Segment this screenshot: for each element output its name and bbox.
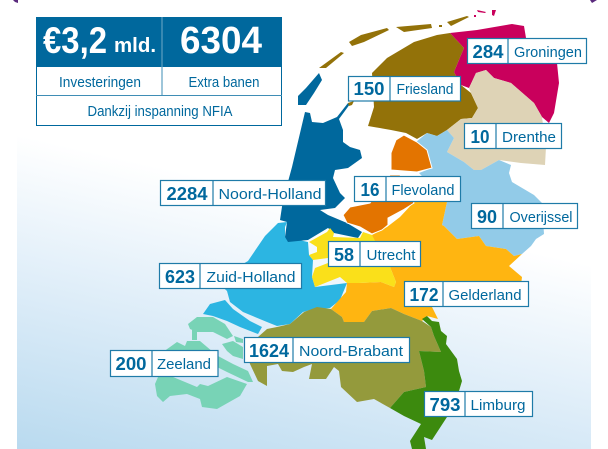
region: Noord-Brabant bbox=[245, 307, 441, 408]
label: Overijssel: Overijssel bbox=[510, 209, 572, 226]
jobs caption: Extra banen bbox=[188, 75, 260, 91]
investment figure: €3,2 bbox=[43, 20, 107, 61]
label: Groningen bbox=[468, 38, 586, 64]
label: Friesland: Friesland bbox=[396, 81, 454, 98]
label: Noord-Holland: Noord-Holland bbox=[218, 186, 322, 203]
region: Drenthe bbox=[447, 70, 546, 170]
label: Groningen: Groningen bbox=[514, 44, 582, 61]
label: Zeeland: 200 bbox=[116, 354, 146, 374]
region: Zuid-Holland bbox=[203, 220, 347, 334]
label: Friesland: 150 bbox=[354, 79, 384, 99]
label: Noord-Brabant bbox=[244, 337, 410, 363]
region: Utrecht bbox=[309, 228, 396, 287]
region: Gelderland bbox=[331, 202, 522, 322]
region: Overijssel bbox=[416, 130, 544, 256]
region: Flevoland bbox=[343, 135, 432, 234]
region: Friesland bbox=[319, 16, 478, 139]
label: Groningen: 284 bbox=[472, 42, 504, 62]
label: Overijssel: 90 bbox=[477, 207, 497, 227]
label: Gelderland: 172 bbox=[410, 285, 438, 305]
label: Drenthe bbox=[464, 123, 562, 149]
label: Noord-Brabant: 1624 bbox=[249, 341, 289, 361]
map of the Netherlands bbox=[155, 10, 559, 449]
label: Noord-Holland: 2284 bbox=[166, 184, 208, 204]
background panel bbox=[17, 100, 591, 449]
label: Utrecht bbox=[328, 241, 420, 267]
label: Zeeland: Zeeland bbox=[157, 356, 211, 373]
header band bbox=[36, 17, 282, 67]
label: Flevoland: Flevoland bbox=[392, 182, 454, 199]
jobs figure: 6304 bbox=[180, 20, 262, 62]
label: Zuid-Holland: Zuid-Holland bbox=[206, 269, 296, 286]
label: Zuid-Holland: 623 bbox=[165, 267, 195, 287]
label: Drenthe: 10 bbox=[470, 127, 490, 147]
label: Drenthe: Drenthe bbox=[502, 129, 556, 146]
label: Zeeland bbox=[110, 350, 218, 377]
purple corner mark, top right bbox=[590, 0, 597, 3]
region: Zeeland bbox=[155, 317, 253, 409]
table outline bbox=[36, 18, 282, 126]
label: Limburg: 793 bbox=[430, 395, 460, 415]
label: Noord-Holland bbox=[160, 180, 326, 206]
label: Gelderland bbox=[404, 281, 528, 307]
label: Limburg bbox=[424, 391, 532, 417]
label: Utrecht: Utrecht bbox=[366, 247, 416, 264]
purple corner mark, top left bbox=[13, 0, 18, 3]
label: Friesland bbox=[348, 76, 460, 101]
label: Limburg: Limburg bbox=[470, 397, 526, 414]
investment unit: mld. bbox=[114, 35, 156, 57]
label: Utrecht: 58 bbox=[334, 245, 354, 265]
source caption: Dankzij inspanning NFIA bbox=[88, 104, 233, 120]
region: Noord-Holland bbox=[280, 73, 362, 242]
investment caption: Investeringen bbox=[59, 75, 141, 91]
region: Limburg bbox=[390, 316, 462, 449]
label: Flevoland: 16 bbox=[360, 180, 380, 200]
label: Gelderland: Gelderland bbox=[448, 287, 522, 304]
summary table bbox=[36, 17, 282, 126]
label: Zuid-Holland bbox=[160, 263, 302, 289]
label: Flevoland bbox=[354, 176, 460, 202]
region: Groningen bbox=[450, 10, 559, 123]
label: Overijssel bbox=[472, 203, 578, 229]
label: Noord-Brabant: Noord-Brabant bbox=[299, 343, 404, 360]
